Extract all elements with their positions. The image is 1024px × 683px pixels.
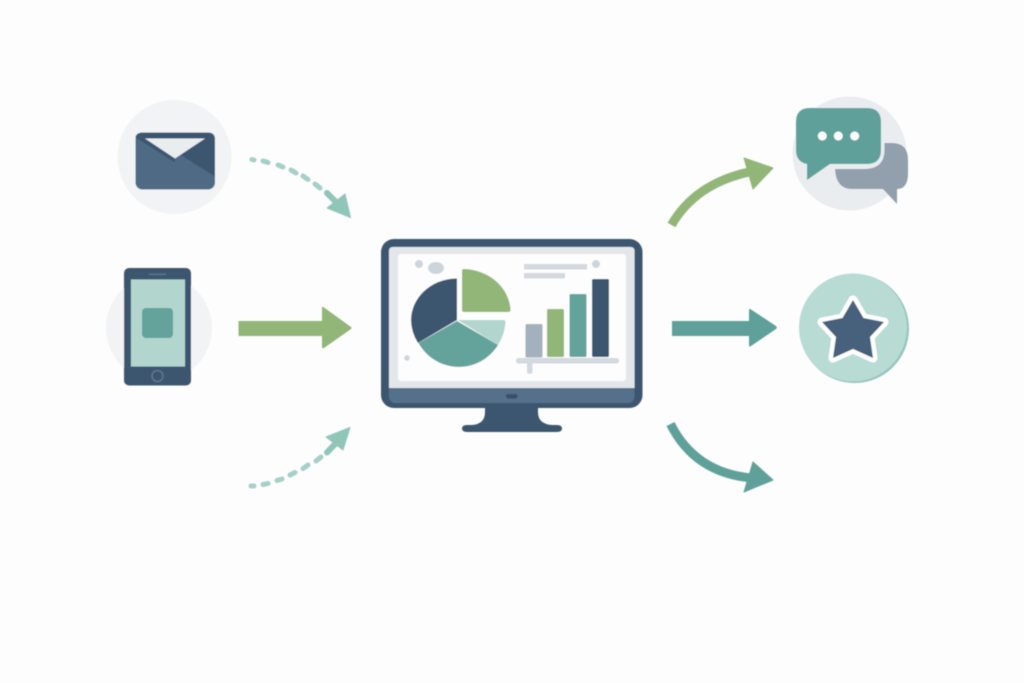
pie chart [411, 269, 510, 367]
arrow: solid teal to star [672, 309, 777, 347]
decorative dots [404, 260, 600, 361]
arrow: curved green to chat [672, 158, 773, 225]
text placeholder lines [524, 264, 587, 278]
grey bubble [835, 143, 908, 204]
icon: chat bubbles [792, 96, 908, 210]
icon: smartphone [106, 268, 212, 386]
monitor stand [462, 406, 562, 432]
arrow: dashed from lower left to monitor [251, 428, 350, 486]
monitor screen [389, 247, 634, 388]
arrow: solid green from phone to monitor [238, 307, 352, 348]
icon: star badge [799, 274, 909, 383]
arrow: curved teal downward [670, 424, 773, 492]
monitor [381, 239, 642, 432]
icon: email [118, 100, 232, 214]
arrow: dashed from email to monitor [252, 160, 350, 218]
bar chart [516, 279, 619, 374]
monitor chin [389, 385, 634, 403]
monitor frame [381, 239, 642, 408]
teal bubble [796, 108, 881, 180]
